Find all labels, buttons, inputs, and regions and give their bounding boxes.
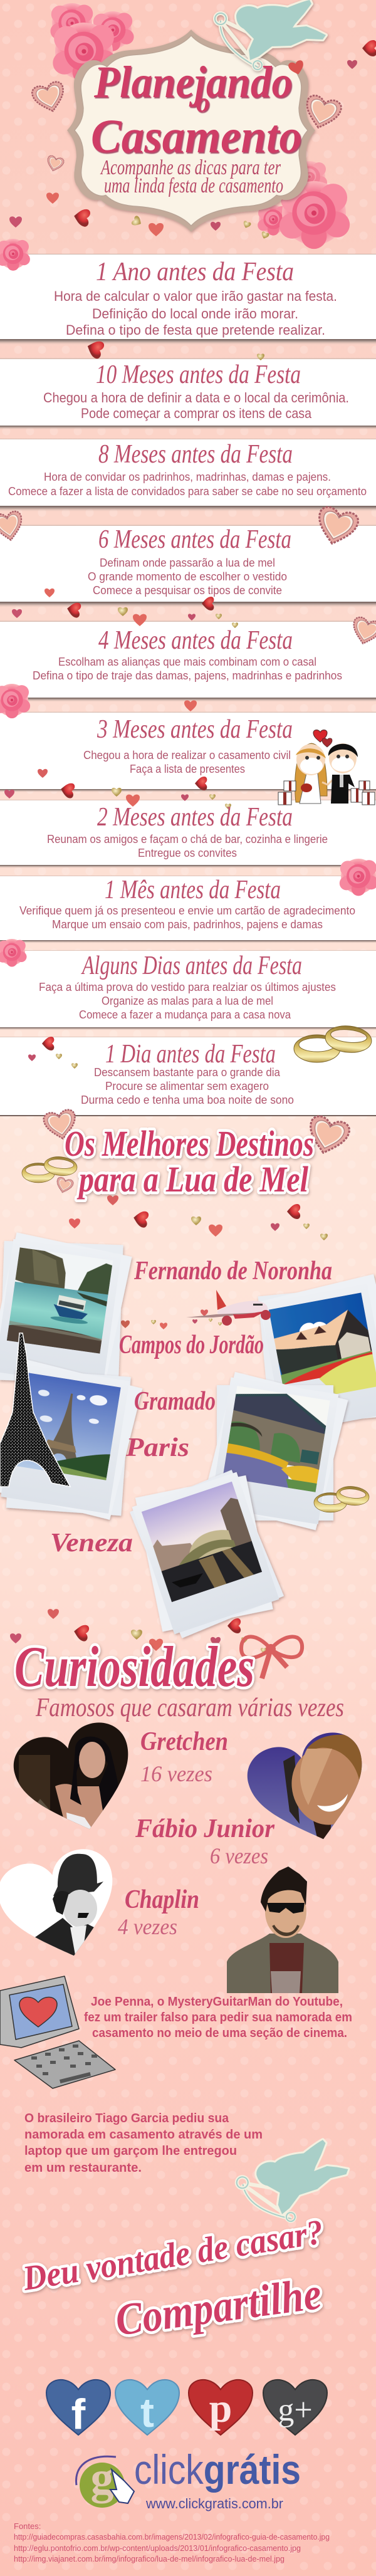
- petals destinos: [69, 1195, 328, 1329]
- title: [91, 57, 302, 163]
- photo: Joe Penna: [227, 1867, 338, 1993]
- step: 1 mes: Marque um ensaio com pais, padrinhos, pajens e damas: [52, 918, 323, 931]
- timeline panels: [0, 254, 376, 1115]
- label: Fábio Junior: 6 vezes: [210, 1843, 268, 1868]
- step: 8 meses: Hora de convidar os padrinhos, madrinhas, damas e pajens.: [44, 470, 331, 483]
- logo: clickgrátis: clickgrátis: [134, 2446, 301, 2493]
- step: 6 meses: [88, 525, 291, 597]
- icon: cupid: [215, 0, 326, 70]
- step: 10 meses: Chegou a hora de definir a data e o local da cerimônia.: [43, 390, 349, 406]
- illustration: bride and groom: [278, 730, 375, 805]
- label: Campos do Jordão: Campos do Jordão: [119, 1331, 264, 1359]
- title: Planejando: [93, 57, 293, 107]
- icon: pinterest heart: [189, 2380, 253, 2435]
- step: 4 meses: Escolham as alianças que mais combinam com o casal: [58, 655, 316, 668]
- step: 6 meses: Definam onde passarão a lua de mel: [100, 556, 275, 569]
- step: 8 meses: [8, 440, 367, 498]
- icon: rings Gramado: [314, 1485, 370, 1512]
- call to action: Compartilhe: [113, 2268, 324, 2345]
- icon: pinterest heart: p: [209, 2385, 232, 2431]
- step: 6 meses: O grande momento de escolher o vestido: [88, 570, 287, 583]
- text: Tiago Garcia: namorada em casamento através de um: [24, 2128, 263, 2142]
- step: 1 mes: 1 Mês antes da Festa: [105, 876, 281, 904]
- plaque cream: [75, 36, 308, 226]
- label: Gramado: Gramado: [134, 1387, 216, 1416]
- logo: clickgrátis: www.clickgratis.com.br: [145, 2496, 283, 2511]
- label: Fábio Junior: [135, 1814, 275, 1868]
- step: 6 meses: 6 Meses antes da Festa: [98, 525, 291, 554]
- heading: curiosidades: Curiosidades: [14, 1635, 254, 1699]
- text: Tiago Garcia: [24, 2112, 263, 2175]
- subtitle: Acompanhe as dicas para ter: [100, 156, 281, 179]
- logo: clickgrátis: g: [90, 2453, 114, 2504]
- lace hearts timeline: [0, 505, 376, 647]
- icon: airplane: [186, 1290, 271, 1326]
- step: 4 meses: Defina o tipo de traje das damas, pajens, madrinhas e padrinhos: [33, 669, 342, 682]
- step: 8 meses: 8 Meses antes da Festa: [98, 440, 293, 469]
- step: 3 meses: Faça a lista de presentes: [130, 762, 245, 775]
- icon: facebook heart: [46, 2380, 110, 2438]
- title: Casamento: [91, 110, 302, 163]
- step: alguns dias: Comece a fazer a mudança para a casa nova: [79, 1008, 291, 1021]
- step: alguns dias: Alguns Dias antes da Festa: [81, 951, 302, 980]
- text: Tiago Garcia: O brasileiro Tiago Garcia pediu sua: [24, 2112, 229, 2125]
- sources: http://eglu.pontofrio.com.br/wp-content/uploads/2013/01/infografico-casamento.jpg: [14, 2543, 301, 2553]
- step: 1 dia: [81, 1040, 294, 1106]
- step: 2 meses: 2 Meses antes da Festa: [97, 803, 293, 832]
- label: Fernando de Noronha: Fernando de Noronha: [133, 1257, 332, 1285]
- step: 1 dia: Procure se alimentar sem exagero: [105, 1079, 269, 1092]
- step: 1 ano: Definição do local onde irão morar.: [92, 306, 298, 322]
- step: 3 meses: Chegou a hora de realizar o casamento civil: [83, 748, 291, 762]
- sources: http://img.viajanet.com.br/img/infografico/lua-de-mel/infografico-lua-de-mel.jpg: [14, 2554, 285, 2563]
- label: Chaplin: Chaplin: [125, 1885, 199, 1914]
- step: 6 meses: Comece a pesquisar os tipos de convite: [93, 584, 282, 597]
- sources: http://guiadecompras.casasbahia.com.br/imagens/2013/02/infografico-guia-de-casamento.jpg: [14, 2532, 330, 2542]
- label plaque: [67, 29, 315, 232]
- photo: Campos do Jordão: [246, 1273, 376, 1438]
- label: Veneza: Veneza: [50, 1529, 133, 1558]
- icon: google plus heart: g+: [278, 2392, 313, 2428]
- roses lower right: [258, 161, 350, 249]
- step: alguns dias: Faça a última prova do vestido para realziar os últimos ajustes: [39, 980, 336, 993]
- call to action: [19, 2212, 326, 2345]
- photo: Fábio Junior: [247, 1732, 362, 1839]
- step: 1 ano: 1 Ano antes da Festa: [96, 258, 294, 286]
- step: 1 dia: Durma cedo e tenha uma boa noite de sono: [81, 1093, 294, 1106]
- step: 3 meses: [83, 715, 293, 775]
- petals timeline: [4, 338, 264, 1069]
- sources: Fontes:: [14, 2521, 41, 2531]
- petals curiosidades: [10, 1609, 267, 1653]
- icon: google plus heart: [263, 2380, 327, 2435]
- lace hearts top: [31, 80, 343, 173]
- icon: facebook heart: f: [71, 2390, 86, 2438]
- step: 10 meses: [43, 360, 349, 421]
- icon: Eiffel tower: [0, 1333, 70, 1487]
- step: 2 meses: Reunam os amigos e façam o chá de bar, cozinha e lingerie: [47, 832, 328, 846]
- text: Joe Penna: Joe Penna, o MysteryGuitarMan do Youtube,: [91, 1995, 343, 2009]
- photo: Gramado: [196, 1367, 354, 1539]
- heading: melhores destinos: [65, 1123, 314, 1200]
- step: 10 meses: 10 Meses antes da Festa: [96, 360, 301, 389]
- step: 1 dia: Descansem bastante para o grande dia: [94, 1065, 281, 1079]
- petals top: [9, 40, 376, 240]
- icon: twitter heart: [115, 2380, 179, 2436]
- label: Chaplin: 4 vezes: [118, 1914, 177, 1939]
- icon: cupid bottom: [232, 2135, 358, 2233]
- label: Gretchen: Gretchen: [140, 1727, 228, 1756]
- step: alguns dias: [39, 951, 336, 1021]
- text: Joe Penna: fez um trailer falso para pedir sua namorada em: [84, 2011, 352, 2024]
- title: o: [196, 87, 210, 118]
- label: Chaplin: [118, 1885, 199, 1939]
- sources: [14, 2521, 330, 2563]
- photo: Fernando de Noronha: [0, 1228, 138, 1396]
- icon: laptop: [0, 1976, 115, 2088]
- text: Joe Penna: casamento no meio de uma seção de cinema.: [92, 2026, 347, 2040]
- step: 1 ano: Hora de calcular o valor que irão gastar na festa.: [54, 288, 337, 304]
- step: 10 meses: Pode começar a comprar os itens de casa: [81, 406, 312, 421]
- icon: wedding rings: [294, 1024, 373, 1062]
- ribbon strips between panels: [0, 339, 376, 1037]
- step: 4 meses: [33, 626, 342, 682]
- text: Tiago Garcia: laptop que um garçom lhe entregou: [24, 2144, 237, 2158]
- step: 3 meses: 3 Meses antes da Festa: [97, 715, 293, 744]
- icon: ribbon bow: [241, 1636, 302, 1678]
- label: Gretchen: 16 vezes: [140, 1761, 212, 1786]
- roses top left: [50, 3, 134, 84]
- label: Paris: Paris: [125, 1433, 189, 1462]
- photo: Gretchen: [14, 1722, 128, 1829]
- step: 4 meses: 4 Meses antes da Festa: [98, 626, 293, 655]
- rose left: [0, 239, 30, 271]
- text: Joe Penna: [84, 1995, 352, 2040]
- lace hearts destinos: [43, 1109, 351, 1195]
- panel bottom shadow: [0, 254, 376, 1116]
- heading: melhores destinos: para a Lua de Mel: [76, 1159, 309, 1200]
- step: 1 mes: Verifique quem já os presenteou e envie um cartão de agradecimento: [19, 904, 355, 917]
- logo: clickgrátis: [76, 2446, 301, 2511]
- photo: Chaplin: [0, 1849, 113, 1956]
- label: Fábio Junior: Fábio Junior: [135, 1814, 275, 1843]
- photo: Veneza: [120, 1462, 289, 1645]
- label: Gretchen: [140, 1727, 228, 1786]
- step: 1 mes: [19, 876, 355, 931]
- step: 2 meses: Entregue os convites: [138, 846, 237, 859]
- step: 2 meses: [47, 803, 328, 859]
- photo: Paris: [0, 1358, 144, 1526]
- subtitle: [100, 156, 283, 197]
- step: 1 dia: 1 Dia antes da Festa: [105, 1040, 276, 1069]
- roses timeline: [0, 684, 376, 967]
- call to action: Deu vontade de casar?: [19, 2212, 326, 2298]
- step: 1 ano: [54, 258, 337, 338]
- text: Tiago Garcia: em um restaurante.: [24, 2161, 142, 2175]
- icon: twitter heart: t: [140, 2389, 154, 2436]
- icon: rings destinos: [22, 1155, 78, 1183]
- step: 1 ano: Defina o tipo de festa que pretende realizar.: [66, 322, 325, 338]
- subtitle: uma linda festa de casamento: [104, 174, 283, 197]
- step: alguns dias: Organize as malas para a lua de mel: [102, 994, 273, 1007]
